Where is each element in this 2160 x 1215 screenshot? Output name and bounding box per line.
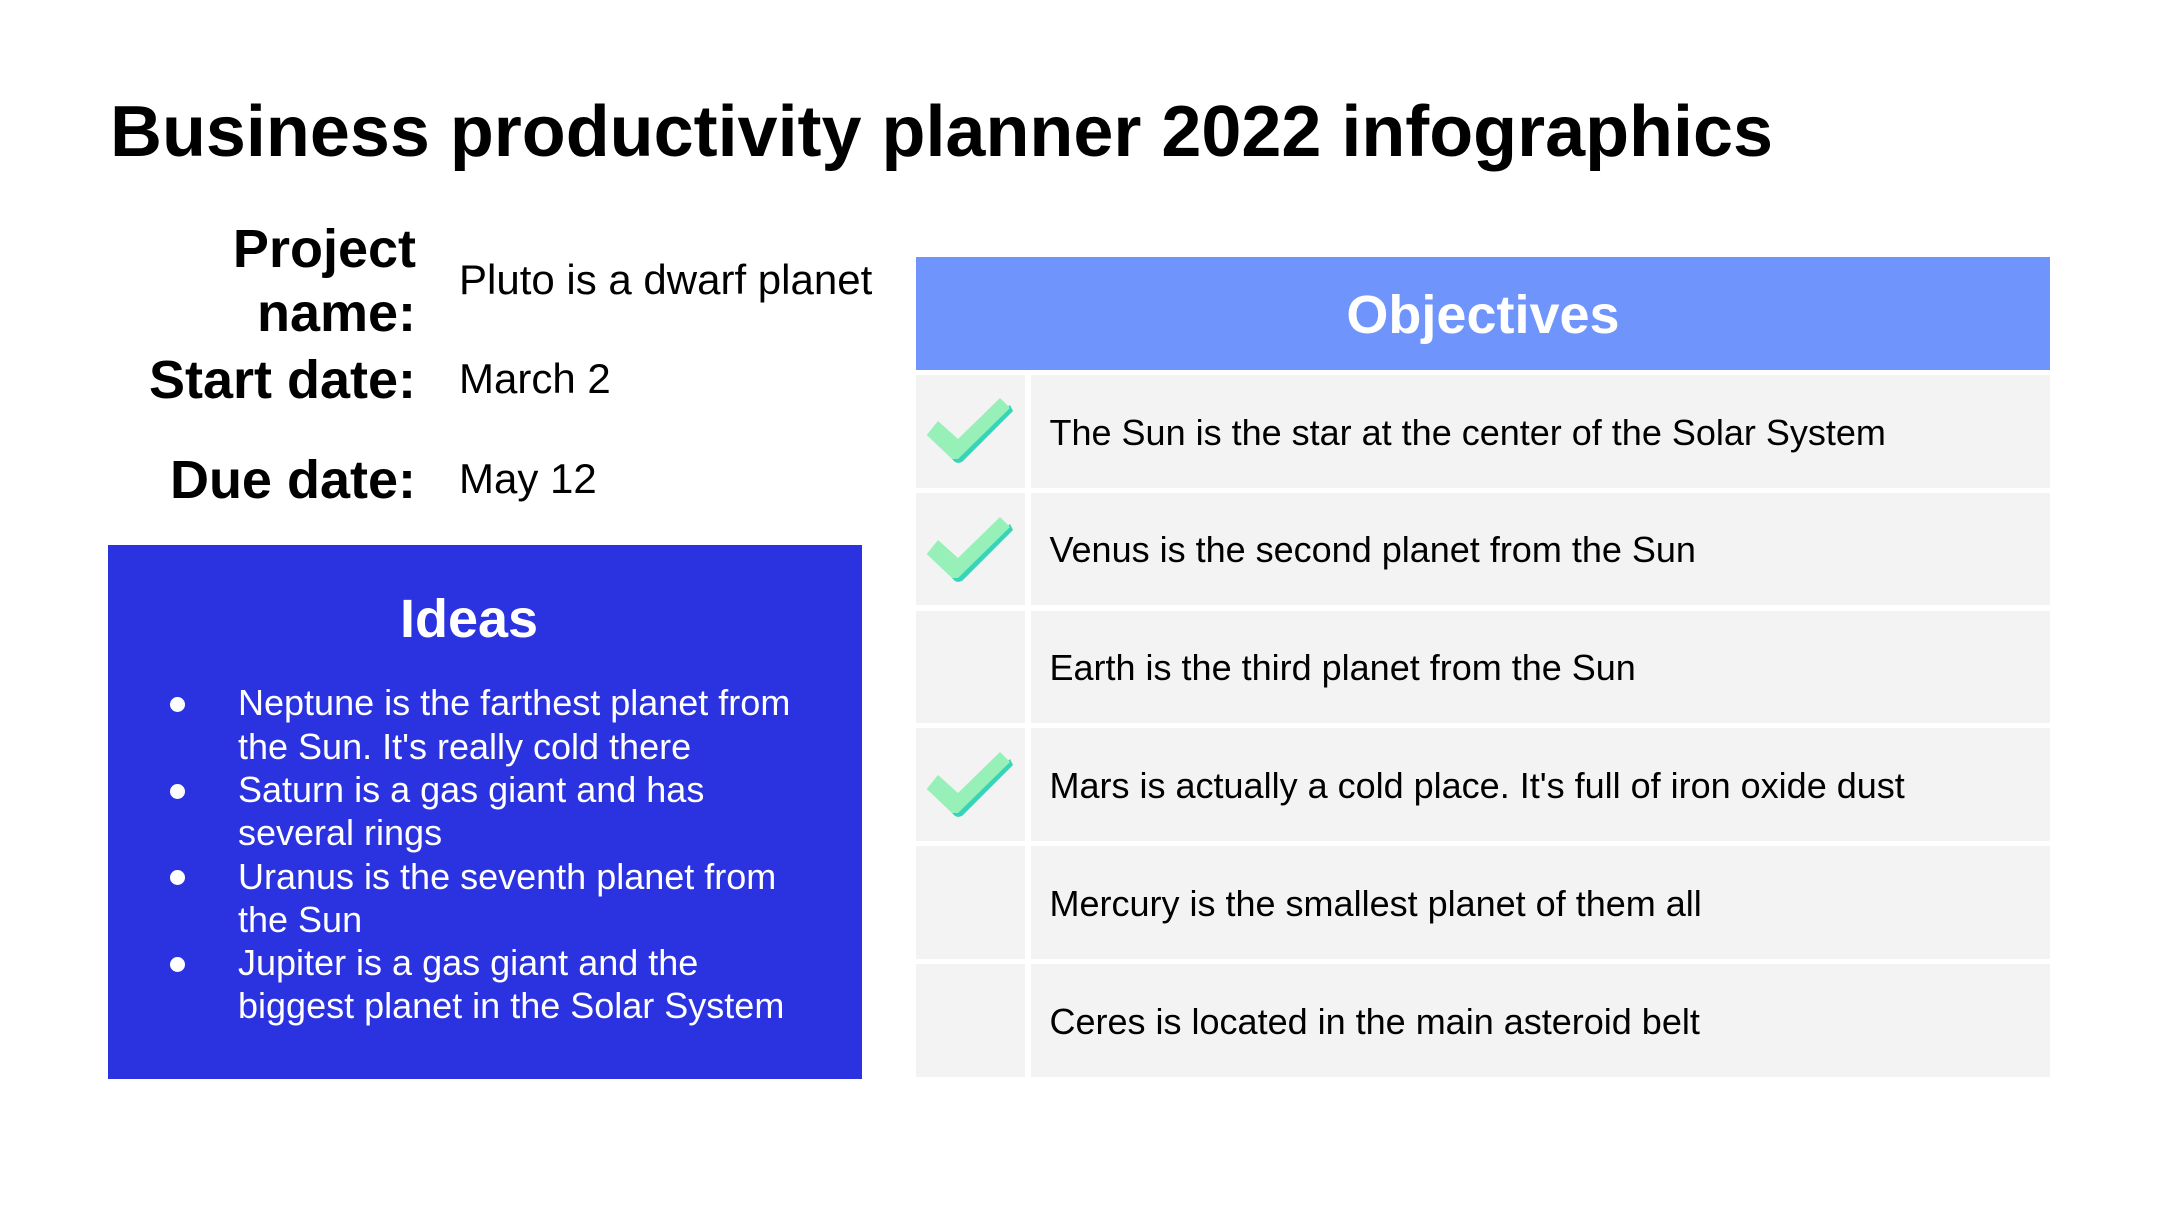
ideas list: Uranus is the seventh planet from — [238, 856, 776, 896]
due date value: May 12 — [459, 455, 597, 502]
ideas list: biggest planet in the Solar System — [238, 985, 784, 1026]
ideas list: the Sun — [238, 899, 362, 940]
objective 1 text: The Sun is the star at the center of the Solar System — [1050, 412, 1886, 453]
title: Business productivity planner 2022 infographics — [110, 92, 1773, 172]
ideas heading: Ideas — [400, 589, 538, 649]
ideas list — [170, 682, 790, 1026]
ideas list: several rings — [238, 812, 442, 853]
objectives table — [916, 375, 2050, 1077]
objectives header — [916, 256, 2050, 370]
project name label: Project — [233, 218, 416, 278]
icon: check 1 — [926, 398, 1013, 463]
icon: check 3 — [926, 752, 1013, 817]
objective 4 text: Mars is actually a cold place. It's full of iron oxide dust — [1050, 765, 1905, 806]
project name label: name: — [257, 282, 416, 342]
start date label: Start date: — [149, 350, 416, 410]
ideas list: the Sun. It's really cold there — [238, 726, 691, 767]
project name label — [233, 218, 416, 342]
objectives header: Objectives — [1346, 284, 1620, 344]
objective 6 text: Ceres is located in the main asteroid belt — [1050, 1000, 1700, 1042]
start date value: March 2 — [459, 355, 611, 402]
panel: ideas — [108, 545, 862, 1078]
ideas list: Jupiter is a gas giant and the — [238, 942, 698, 983]
objective 2 text: Venus is the second planet from the Sun — [1050, 529, 1696, 570]
objective 3 text: Earth is the third planet from the Sun — [1050, 647, 1636, 688]
due date label: Due date: — [170, 450, 416, 510]
ideas list: Saturn is a gas giant and has — [238, 769, 704, 810]
project name value: Pluto is a dwarf planet — [459, 256, 872, 303]
icon: check 2 — [926, 517, 1013, 582]
ideas list: Neptune is the farthest planet from — [238, 682, 790, 723]
objective 5 text: Mercury is the smallest planet of them all — [1050, 883, 1702, 924]
